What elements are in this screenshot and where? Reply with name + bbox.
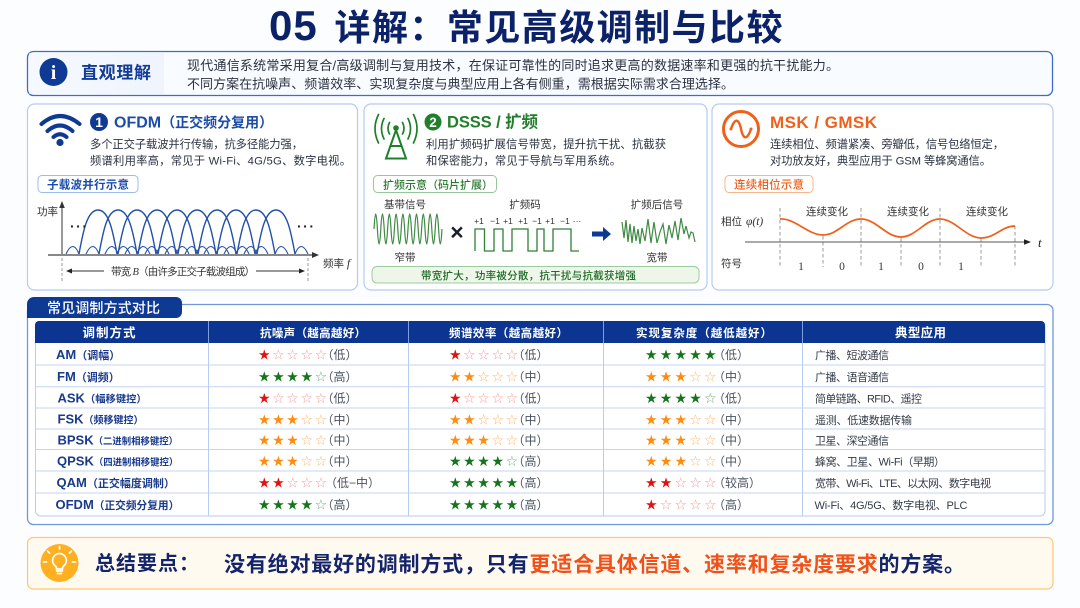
chart: continuous phase: 1 (798, 261, 804, 273)
text block: OFDM description: 多个正交子载波并行传输，抗多径能力强， (90, 137, 303, 151)
row: ASK: （低） (512, 392, 549, 406)
chart: spreading diagram (374, 198, 695, 264)
panel: MSK (712, 104, 1053, 290)
label: subcarrier pill: 子载波并行示意 (47, 178, 129, 192)
chart: spreading diagram: +1 (503, 216, 513, 226)
row: FM (57, 369, 889, 386)
icon: info (40, 58, 68, 86)
table header: 抗噪声（越高越好） (260, 326, 366, 340)
row: OFDM (56, 497, 968, 514)
chart: continuous phase: 连续变化 (966, 205, 1008, 218)
row: BPSK (58, 432, 889, 449)
row: QAM: ★★★★★ (449, 476, 520, 492)
row: FM: FM（调频） (57, 369, 120, 384)
row: FSK: FSK（频移键控） (58, 412, 144, 426)
row: QPSK: QPSK（四进制相移键控） (57, 454, 178, 468)
row: FSK: ★★★☆☆ (258, 412, 329, 428)
table header: 实现复杂度（越低越好） (636, 326, 772, 340)
table: modulation comparison (35, 321, 1045, 516)
chart: continuous phase (721, 205, 1042, 273)
table header: 调制方式 (82, 325, 136, 340)
chart: continuous phase: 连续变化 (806, 205, 848, 218)
panel: comparison table (27, 297, 1053, 524)
table header (82, 325, 946, 340)
row: BPSK: （中） (512, 432, 549, 448)
heading: DSSS: 2 (429, 115, 437, 130)
row: FSK: （中） (713, 412, 749, 427)
panel: intuitive understanding (28, 52, 1052, 96)
text block: OFDM description (90, 137, 351, 168)
icon: wifi (42, 116, 80, 146)
row: QAM: （低−中） (325, 475, 380, 490)
row: OFDM: ★★★★☆ (258, 498, 329, 514)
chart: spreading diagram: 基带信号 (384, 198, 426, 211)
row: FSK: （中） (322, 412, 358, 427)
chart: OFDM subcarriers: 带宽 B（由许多正交子载波组成） (111, 265, 255, 278)
row: ASK: ★★★★☆ (645, 391, 719, 407)
table header: 频谱效率（越高越好） (449, 326, 568, 340)
row: QPSK: 蜂窝、卫星、Wi-Fi（早期） (815, 454, 945, 468)
heading: summary: 总结要点： (95, 552, 199, 575)
row: OFDM: （高） (322, 497, 358, 512)
row: QPSK (57, 454, 945, 470)
heading: OFDM: OFDM（正交频分复用） (114, 114, 273, 132)
row: OFDM: ★☆☆☆☆ (645, 498, 719, 514)
row: AM: （低） (322, 348, 358, 362)
row: ASK: （低） (713, 392, 749, 406)
chart: continuous phase: 0 (918, 261, 924, 273)
icon: antenna tower (375, 114, 417, 158)
row: AM: （低） (713, 348, 749, 362)
chart: continuous phase: t (1038, 235, 1042, 250)
chart: spreading diagram: +1 (518, 216, 528, 226)
row: AM: ★☆☆☆☆ (449, 348, 520, 364)
chart: continuous phase: 1 (958, 261, 964, 273)
chart: spreading diagram: +1 (474, 216, 484, 226)
text block: DSSS description (426, 137, 666, 168)
chart: spreading diagram: 扩频码 (509, 198, 541, 211)
text block: DSSS description: 利用扩频码扩展信号带宽，提升抗干扰、抗截获 (426, 137, 666, 151)
chart: continuous phase: 符号 (721, 257, 742, 270)
text block: MSK description: 连续相位、频谱紧凑、旁瓣低，信号包络恒定， (770, 137, 1004, 151)
chart: spreading diagram: 扩频后信号 (631, 198, 683, 211)
chart: spreading diagram: −1 (532, 216, 542, 226)
text block: intro: 不同方案在抗噪声、频谱效率、实现复杂度与典型应用上各有侧重，需根据实际需求合理选择。 (187, 76, 734, 92)
heading: OFDM: 1 (95, 114, 103, 130)
row: FM: （中） (713, 369, 749, 384)
chart: spreading diagram: ··· (573, 216, 581, 226)
row: BPSK: （中） (322, 432, 358, 448)
row: QPSK: （高） (512, 454, 549, 468)
label: subcarrier pill (38, 176, 138, 192)
row: QPSK: ★★★★☆ (449, 454, 520, 470)
icon: info: i (51, 62, 57, 84)
heading: DSSS: DSSS / 扩频 (447, 112, 538, 132)
chart: OFDM subcarriers: ··· (297, 218, 316, 234)
row: QAM: ★★☆☆☆ (645, 476, 719, 492)
row: ASK: ★☆☆☆☆ (258, 391, 329, 407)
row: FSK: ★★☆☆☆ (449, 412, 520, 428)
row: AM: 广播、短波通信 (815, 348, 889, 362)
chart: OFDM subcarriers (37, 201, 352, 281)
chart: spreading diagram: −1 (560, 216, 570, 226)
row: ASK: ASK（幅移键控） (58, 390, 147, 406)
row: QPSK: （中） (713, 454, 749, 468)
chart: spreading diagram: 宽带 (646, 251, 668, 264)
row: OFDM: OFDM（正交频分复用） (56, 497, 179, 512)
row: FM: ★★★☆☆ (645, 370, 719, 386)
row: BPSK: ★★★☆☆ (449, 433, 520, 449)
row: OFDM: （高） (512, 497, 549, 512)
heading tab: comparison (27, 297, 182, 318)
row: QAM (56, 475, 991, 492)
row: FSK: 遥测、低速数据传输 (815, 413, 912, 427)
callout: bandwidth expansion: 带宽扩大，功率被分散，抗干扰与抗截获增强 (421, 269, 636, 282)
row: BPSK: ★★★☆☆ (645, 433, 719, 449)
row: FM: 广播、语音通信 (815, 370, 889, 384)
row: FSK: （中） (512, 412, 549, 427)
chart: spreading diagram: 窄带 (394, 251, 416, 264)
row: OFDM: ★★★★★ (449, 498, 520, 514)
heading: MSK: MSK / GMSK (770, 113, 878, 132)
callout: bandwidth expansion (372, 266, 699, 283)
row: ASK: （低） (322, 392, 358, 406)
chart: spreading diagram: +1 (545, 216, 555, 226)
row: QPSK: （中） (322, 454, 358, 468)
row: OFDM: Wi-Fi、4G/5G、数字电视、PLC (814, 498, 968, 512)
row: AM: ★★★★★ (645, 348, 719, 364)
row: FM: （中） (512, 369, 549, 384)
text block: intro: 现代通信系统常采用复合/高级调制与复用技术，在保证可靠性的同时追求更高的数据速率和更强的抗干扰能力。 (187, 58, 839, 73)
table header: 典型应用 (895, 325, 946, 340)
text block: OFDM description: 频谱利用率高，常见于 Wi-Fi、4G/5G、数字电视。 (90, 154, 351, 168)
text block: MSK description (770, 137, 1004, 168)
chart: continuous phase: 连续变化 (887, 205, 929, 218)
row: QAM: ★★☆☆☆ (258, 476, 329, 492)
row: FM: ★★★★☆ (258, 370, 329, 386)
panel: OFDM (28, 104, 358, 290)
label: spreading pill: 扩频示意（码片扩展） (383, 178, 493, 192)
row: QAM: （较高） (713, 475, 761, 490)
row: QPSK: ★★★☆☆ (645, 454, 719, 470)
text block: summary: 没有绝对最好的调制方式，只有更适合具体信道、速率和复杂度要求的方案。 (224, 552, 965, 576)
label: continuous phase pill (725, 176, 813, 192)
row: AM (56, 347, 889, 364)
text block: DSSS description: 和保密能力，常见于导航与军用系统。 (426, 154, 621, 168)
label: continuous phase pill: 连续相位示意 (734, 178, 804, 192)
icon: light bulb (40, 544, 78, 582)
row: QAM: QAM（正交幅度调制） (56, 475, 175, 490)
chart: continuous phase: 1 (878, 261, 884, 273)
panel: DSSS (364, 104, 707, 290)
chart: spreading diagram: −1 (490, 216, 500, 226)
row: QPSK: ★★★☆☆ (258, 454, 329, 470)
heading: intuitive understanding: 直观理解 (81, 62, 151, 82)
row: BPSK: 卫星、深空通信 (815, 434, 889, 448)
row: AM: AM（调幅） (56, 347, 120, 362)
row: AM: ★☆☆☆☆ (258, 348, 329, 364)
chart: OFDM subcarriers: ··· (70, 218, 88, 234)
panel: summary (28, 538, 1053, 589)
chart: spreading diagram: × (450, 219, 464, 245)
icon: sine wave (724, 112, 758, 146)
row: QAM: （高） (512, 475, 549, 490)
row: OFDM: （高） (713, 497, 749, 512)
row: ASK (58, 390, 922, 407)
chart: continuous phase: φ(t) (746, 216, 763, 228)
row: ASK: 简单链路、RFID、遥控 (815, 392, 922, 406)
row: ASK: ★☆☆☆☆ (449, 391, 520, 407)
row: FM: ★★☆☆☆ (449, 370, 520, 386)
label: spreading pill (374, 176, 496, 192)
row: BPSK: BPSK（二进制相移键控） (58, 432, 178, 448)
row: QAM: 宽带、Wi-Fi、LTE、以太网、数字电视 (815, 476, 991, 490)
title: 详解：常见高级调制与比较 (334, 7, 784, 48)
chart: continuous phase: 0 (839, 261, 845, 273)
text block: intro (187, 58, 839, 92)
row: FSK: ★★★☆☆ (645, 412, 719, 428)
row: FSK (58, 412, 912, 428)
text block: MSK description: 对功放友好，典型应用于 GSM 等蜂窝通信。 (770, 154, 991, 168)
row: BPSK: （中） (713, 432, 749, 448)
row: BPSK: ★★★☆☆ (258, 433, 329, 449)
chart: continuous phase: 相位 (721, 215, 742, 228)
row: AM: （低） (512, 348, 549, 362)
row: FM: （高） (322, 369, 358, 384)
heading tab: comparison: 常见调制方式对比 (47, 300, 160, 316)
title: 05 (269, 2, 318, 49)
chart: OFDM subcarriers: 功率 (37, 205, 58, 218)
chart: OFDM subcarriers: 频率 f (323, 256, 352, 270)
